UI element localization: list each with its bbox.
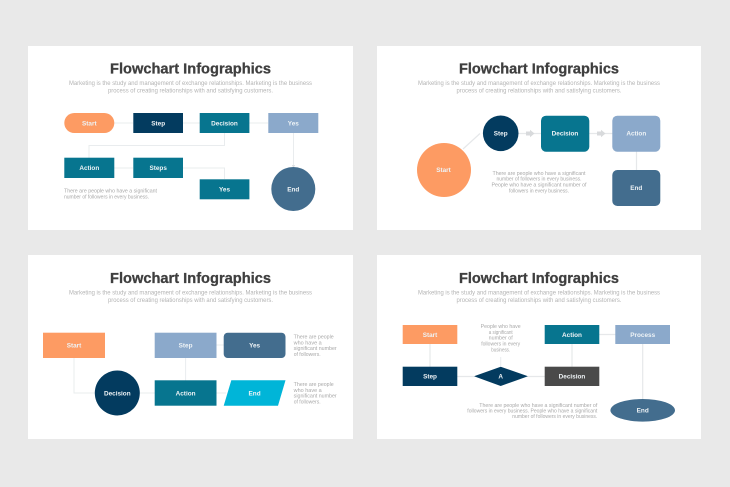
node: step: Step <box>423 374 437 381</box>
connectors <box>74 345 226 393</box>
node: process: Process <box>630 332 656 339</box>
node: start: Start <box>67 343 82 350</box>
node: end <box>612 170 660 206</box>
node: yes: Yes <box>249 343 261 350</box>
note text: top: followers in every <box>481 342 521 348</box>
subtitle: process of creating relationships with and satisfying customers. <box>456 297 622 304</box>
note text: yes: who have a <box>294 340 322 346</box>
node: start: Start <box>436 167 452 174</box>
note text: end <box>294 382 337 405</box>
subtitle <box>69 290 312 304</box>
subtitle: process of creating relationships with and satisfying customers. <box>108 88 273 94</box>
note text: bottom: followers in every business. People who have a significant <box>467 408 598 414</box>
panel: flowchart with circles and rounded boxes <box>377 46 701 230</box>
node: decision diamond: A <box>498 374 503 381</box>
note text: number of followers in every business. <box>496 177 582 183</box>
subtitle: process of creating relationships with and satisfying customers. <box>108 297 273 304</box>
node: action: Action <box>79 165 99 172</box>
node: action: Action <box>562 332 582 339</box>
note text: top: People who have <box>481 324 521 330</box>
arrow: decision to action <box>597 130 606 137</box>
node: end: End <box>637 408 649 415</box>
node: action <box>155 380 216 406</box>
connectors <box>463 134 636 170</box>
node: start: Start <box>82 120 97 127</box>
node: action <box>64 158 114 178</box>
node: step: Step <box>179 343 193 350</box>
node: action: Action <box>176 390 196 397</box>
node: start <box>417 143 471 197</box>
note text: top: number of <box>489 336 513 342</box>
node: step: Step <box>151 120 165 127</box>
node: end <box>610 399 675 422</box>
node: steps: Steps <box>149 165 167 172</box>
node: decision: Decision <box>559 374 585 381</box>
node: yes branch: Yes <box>219 186 230 193</box>
subtitle: process of creating relationships with and satisfying customers. <box>456 88 622 94</box>
node: start: Start <box>423 332 438 339</box>
subtitle: Marketing is the study and management of exchange relationships. Marketing is the business <box>69 80 312 87</box>
node: end: End <box>287 186 299 193</box>
note text <box>492 171 587 194</box>
node: step <box>133 113 183 133</box>
node: start <box>64 113 114 133</box>
node: action: Action <box>626 131 646 138</box>
note text: top: a significant <box>489 330 513 336</box>
note text <box>64 188 158 200</box>
node: yes branch <box>200 179 249 199</box>
node: end: End <box>249 390 261 397</box>
node: process <box>615 325 670 344</box>
note text: top: business. <box>491 347 510 353</box>
node: decision diamond <box>474 367 528 386</box>
node: step <box>155 333 216 358</box>
node: decision <box>541 116 589 152</box>
subtitle: Marketing is the study and management of exchange relationships. Marketing is the business <box>418 80 660 87</box>
node: step: Step <box>494 131 508 138</box>
node: decision <box>545 367 599 386</box>
note text: end: significant number <box>294 394 337 400</box>
note text: number of followers in every business. <box>64 194 149 200</box>
node: decision <box>95 370 140 416</box>
note text: top <box>481 324 521 353</box>
node: steps <box>133 158 183 178</box>
node: yes: Yes <box>288 120 299 127</box>
panel: flowchart with side notes <box>28 255 353 439</box>
node: decision: Decision <box>211 120 238 127</box>
node: end <box>224 380 286 406</box>
node: yes <box>224 333 286 358</box>
subtitle: Marketing is the study and management of exchange relationships. Marketing is the business <box>418 290 660 296</box>
title: Flowchart Infographics <box>459 270 619 287</box>
note text: bottom: number of followers in every business. <box>512 414 597 420</box>
subtitle <box>418 290 660 304</box>
note text: followers in every business. <box>509 188 569 194</box>
note text: end: who have a <box>294 388 322 394</box>
connectors <box>89 123 295 179</box>
panel: flowchart with pill start and rectangles <box>28 46 353 230</box>
node: step <box>483 116 518 151</box>
note text: People who have a significant number of <box>492 183 587 189</box>
connectors <box>430 334 643 399</box>
node: start <box>403 325 457 344</box>
node: end <box>271 167 315 211</box>
node: action <box>545 325 599 344</box>
node: end: End <box>630 185 642 192</box>
note text: yes <box>294 334 337 358</box>
node: decision <box>200 113 249 133</box>
node: yes <box>268 113 318 133</box>
note text: end: There are people <box>294 382 334 388</box>
note text: There are people who have a significant <box>64 188 158 194</box>
subtitle <box>69 80 312 94</box>
title: Flowchart Infographics <box>459 60 619 78</box>
note text: yes: There are people <box>294 334 334 340</box>
note text: yes: of followers. <box>294 352 321 358</box>
note text: bottom <box>467 403 598 420</box>
arrow: step to decision <box>526 130 534 137</box>
panel: flowchart with diamond and ellipse <box>377 255 701 439</box>
node: action <box>612 116 660 152</box>
node: decision: Decision <box>552 131 578 138</box>
note text: yes: significant number <box>294 346 337 352</box>
subtitle <box>418 80 660 94</box>
note text: There are people who have a significant <box>492 171 586 177</box>
note text: bottom: There are people who have a significant number of <box>479 403 598 409</box>
node: step <box>403 367 457 386</box>
title: Flowchart Infographics <box>110 270 271 287</box>
node: decision: Decision <box>104 390 131 397</box>
note text: end: of followers. <box>294 399 321 405</box>
node: start <box>43 333 105 358</box>
title: Flowchart Infographics <box>110 60 271 78</box>
subtitle: Marketing is the study and management of exchange relationships. Marketing is the business <box>69 290 312 296</box>
